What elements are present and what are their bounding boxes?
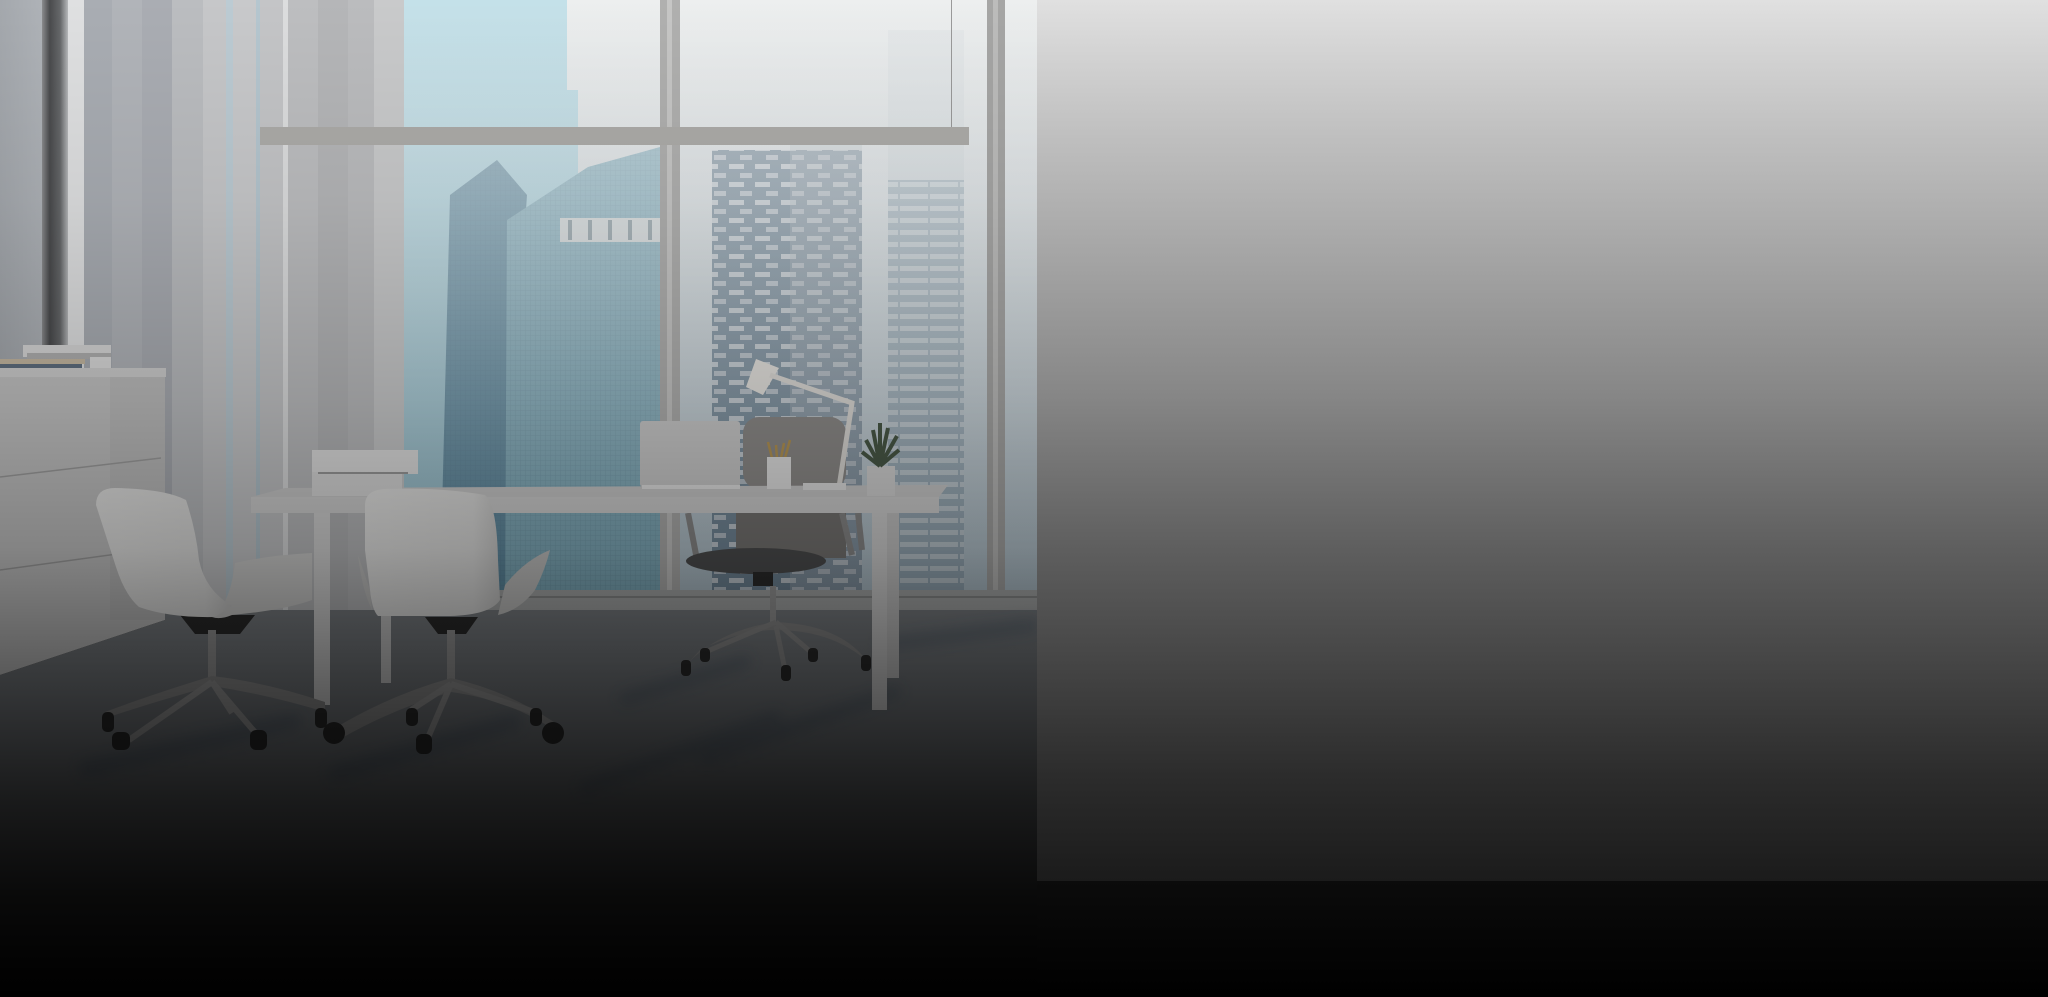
- office scene photo: [0, 0, 1037, 997]
- potted plant: [862, 423, 899, 496]
- right chair left arm: [358, 555, 372, 610]
- desk: [251, 485, 948, 710]
- left guest chair: [96, 488, 327, 750]
- laptop: [640, 421, 740, 489]
- tower: upper blue: [404, 0, 578, 592]
- floor: [0, 610, 1037, 997]
- paper tray: [312, 450, 418, 496]
- desk lamp: [746, 359, 852, 490]
- back office chair: [681, 417, 871, 681]
- right guest chair: [323, 489, 564, 754]
- right chair arm: [498, 550, 550, 615]
- right chair back: [365, 489, 500, 616]
- cabinet: [0, 345, 166, 675]
- scene darkening overlay: [0, 0, 1037, 997]
- left wall and curtains: [0, 0, 404, 610]
- books: [0, 345, 111, 368]
- right gradient panel: [1037, 0, 2048, 881]
- left chair seat arm: [212, 553, 312, 618]
- tower: right pale: [888, 30, 964, 592]
- pencil cup: [767, 440, 791, 489]
- dark band below panel: [1037, 881, 2048, 997]
- tower: white band: [560, 218, 660, 242]
- ceiling light bar: [260, 127, 969, 145]
- left chair back: [96, 488, 232, 617]
- tower: centre blocks: [712, 150, 862, 592]
- window with skyline: [404, 0, 1037, 610]
- atmospheric haze: [404, 0, 1037, 592]
- tower: glass faceted: [505, 147, 660, 592]
- tower: dark faceted: [440, 160, 547, 592]
- window frame: [404, 0, 1037, 610]
